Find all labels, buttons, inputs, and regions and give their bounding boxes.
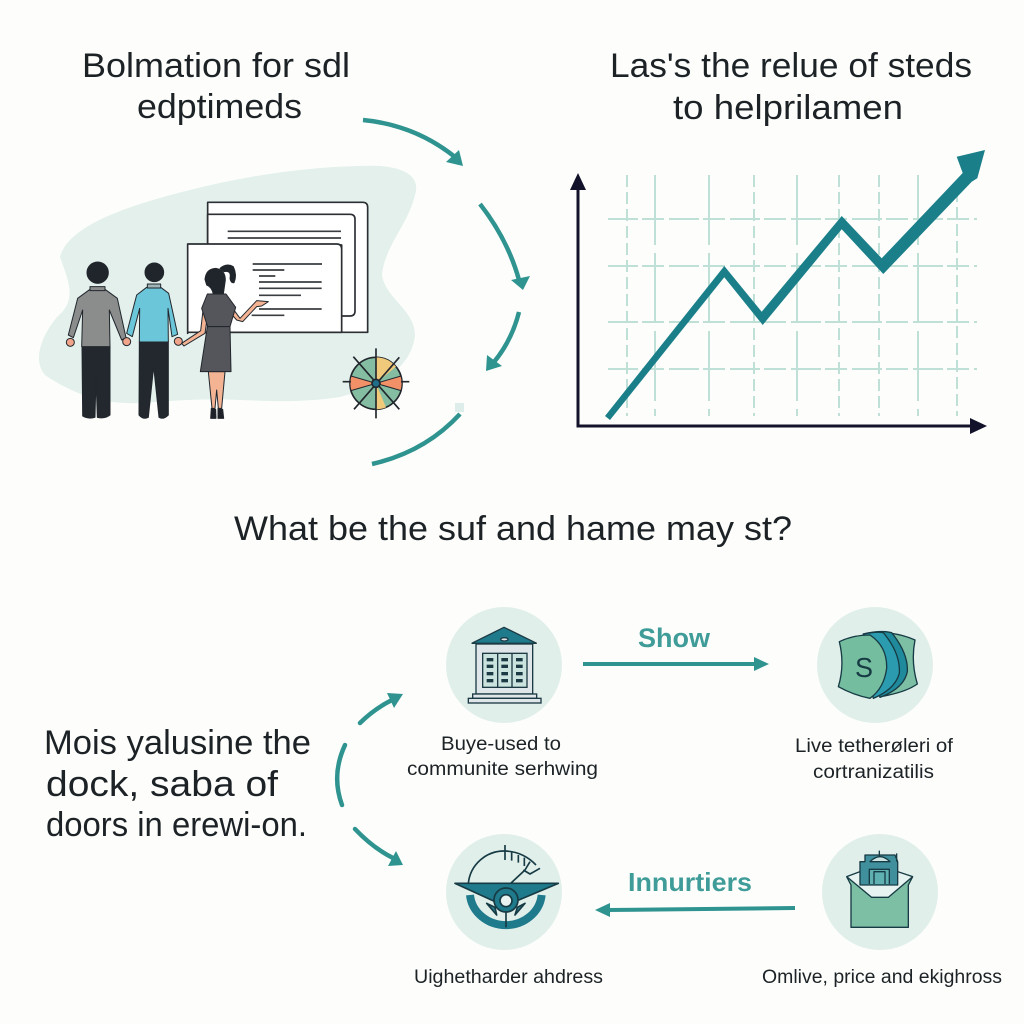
heading: top right <box>610 47 972 127</box>
arrow: Innurtiers <box>595 867 795 917</box>
grid lines <box>608 175 977 416</box>
arrow: Show <box>583 623 769 671</box>
text block: left: Mois yalusine the <box>44 724 311 762</box>
icon: envelope with building <box>847 851 913 927</box>
documents <box>188 202 368 333</box>
text block: left: doors in erewi-on. <box>46 806 307 844</box>
arrows: curved flow between top panels <box>363 120 530 464</box>
arrow 1 <box>363 120 463 166</box>
arrow down <box>355 829 403 866</box>
axes <box>578 186 975 426</box>
arrow: Innurtiers: Innurtiers <box>628 867 752 897</box>
heading: centre question: What be the suf and hame may st? <box>234 510 792 548</box>
arrow 2 <box>480 204 530 290</box>
arrow 4 <box>372 403 464 464</box>
heading: top left: Bolmation for sdl <box>82 47 350 85</box>
line chart: rising trend <box>570 150 987 434</box>
label <box>407 734 598 780</box>
icon: money roll <box>838 632 917 698</box>
label: Omlive, price and ekighross <box>762 967 1002 988</box>
node: bank <box>407 607 598 780</box>
label: Live tetherøleri of <box>795 736 954 757</box>
label: cortranizatilis <box>813 762 934 783</box>
label <box>795 736 954 783</box>
icon: colour wheel <box>343 348 409 418</box>
text block: left: dock, saba of <box>46 763 279 804</box>
text block: left <box>44 724 311 844</box>
label: Buye-used to <box>441 734 561 755</box>
heading: top right: Las's the relue of steds <box>610 47 972 85</box>
background blob <box>39 166 416 403</box>
arrows: left branching <box>337 693 403 866</box>
icon: gauge <box>455 845 558 927</box>
heading: top right: to helprilamen <box>673 89 903 127</box>
arrow up <box>360 693 403 723</box>
node: gauge <box>414 834 603 988</box>
heading: top left: edptimeds <box>137 88 302 126</box>
label: Uighetharder ahdress <box>414 967 603 988</box>
arrow 3 <box>486 312 519 371</box>
label: communite serhwing <box>407 759 598 780</box>
person: man in blue shirt <box>127 263 182 418</box>
trend line arrow <box>605 150 985 420</box>
node: money <box>795 607 954 783</box>
person: man in grey shirt <box>66 262 131 418</box>
person: woman presenting <box>182 265 268 418</box>
heading: top left <box>82 47 350 126</box>
arrow: Show: Show <box>638 623 711 653</box>
illustration: team in front of documents <box>39 166 416 418</box>
icon: bank building <box>468 627 541 703</box>
node: envelope <box>762 834 1002 988</box>
arc <box>337 745 345 805</box>
node: money: S <box>855 652 873 683</box>
